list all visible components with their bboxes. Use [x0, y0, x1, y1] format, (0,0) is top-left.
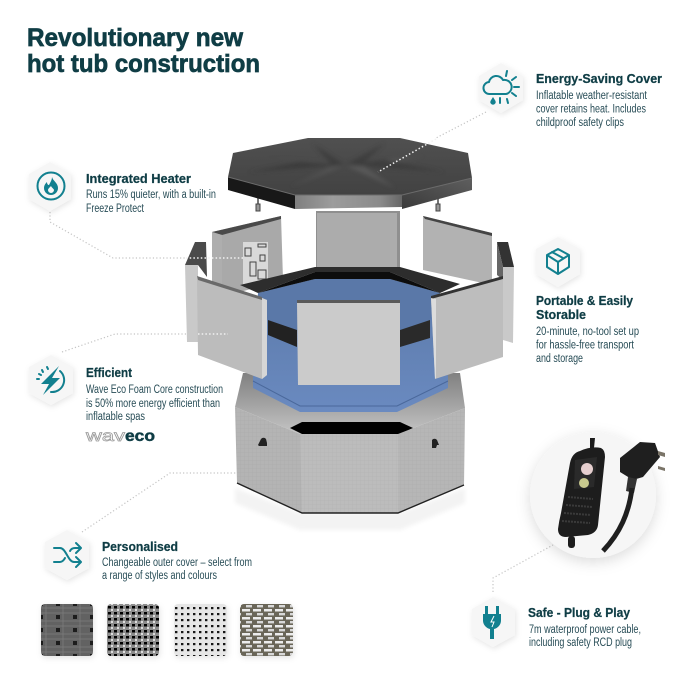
description: and storage	[536, 353, 583, 365]
base outer shell	[235, 373, 465, 513]
heading: Efficient	[86, 365, 133, 380]
feature: efficient	[29, 355, 223, 445]
heading: Portable & Easily	[536, 293, 634, 308]
heading: Storable	[536, 307, 586, 322]
hot tub exploded diagram	[185, 138, 514, 530]
feature: safe plug and play	[472, 597, 641, 649]
feature: personalised	[45, 530, 252, 582]
description: for hassle-free transport	[536, 340, 635, 352]
icon: weather cloud	[479, 63, 523, 113]
title	[27, 24, 260, 78]
description: childproof safety clips	[536, 117, 624, 129]
blue tub liner	[253, 279, 448, 412]
waveco logo	[85, 428, 155, 445]
feature: portable and storable	[536, 237, 639, 365]
icon: electric plug	[472, 597, 515, 647]
description	[536, 90, 648, 129]
description	[536, 326, 639, 365]
floor shadow	[235, 488, 465, 530]
front left panel	[197, 276, 267, 379]
back left panel with heater	[212, 216, 283, 292]
feature: integrated heater	[29, 162, 216, 215]
dotted leader lines	[50, 112, 553, 592]
swatch: white weave	[174, 604, 227, 656]
description: a range of styles and colours	[102, 570, 217, 582]
swatch: black and white weave	[107, 604, 159, 656]
description: inflatable spas	[86, 411, 145, 423]
description: Wave Eco Foam Core construction	[86, 384, 223, 396]
mains plug and cable	[603, 442, 665, 551]
description	[102, 557, 252, 582]
feature: energy-saving cover	[479, 63, 662, 129]
heading	[536, 293, 634, 322]
icon: box	[536, 237, 580, 287]
lid clips	[256, 190, 440, 211]
RCD remote	[558, 438, 605, 548]
tub black rim	[240, 267, 460, 293]
description: 20-minute, no-tool set up	[536, 326, 639, 338]
description: is 50% more energy efficient than	[86, 398, 220, 410]
insulated lid	[228, 138, 472, 209]
description: Runs 15% quieter, with a built-in	[86, 189, 216, 201]
description: 7m waterproof power cable,	[529, 624, 641, 636]
description: cover retains heat. Includes	[536, 104, 646, 116]
description: Inflatable weather-resistant	[536, 90, 648, 102]
back right panel	[423, 216, 492, 285]
waveco logo: wav	[85, 428, 125, 445]
title: hot tub construction	[27, 50, 260, 78]
heading: Energy-Saving Cover	[536, 71, 662, 86]
far panels behind tub	[185, 242, 514, 343]
swatch: taupe weave	[240, 604, 293, 656]
title: Revolutionary new	[27, 24, 244, 52]
heading: Safe - Plug & Play	[528, 605, 631, 620]
description	[86, 189, 216, 215]
front right panel	[431, 276, 503, 379]
description: Freeze Protect	[86, 203, 145, 215]
icon: flame	[29, 162, 71, 211]
heading: Integrated Heater	[86, 171, 191, 186]
swatch: dark grey weave	[41, 604, 93, 656]
description: Changeable outer cover – select from	[102, 557, 252, 569]
icon: shuffle arrows	[45, 530, 89, 580]
description: including safety RCD plug	[529, 637, 632, 649]
icon: lightning bolt	[29, 355, 73, 405]
front centre panel	[297, 300, 400, 385]
power cable photo callout	[530, 432, 665, 558]
description	[529, 624, 641, 649]
waveco logo: eco	[125, 428, 155, 445]
fabric swatches	[41, 604, 293, 656]
back centre panel	[316, 211, 400, 269]
heading: Personalised	[102, 539, 178, 554]
description	[86, 384, 223, 423]
